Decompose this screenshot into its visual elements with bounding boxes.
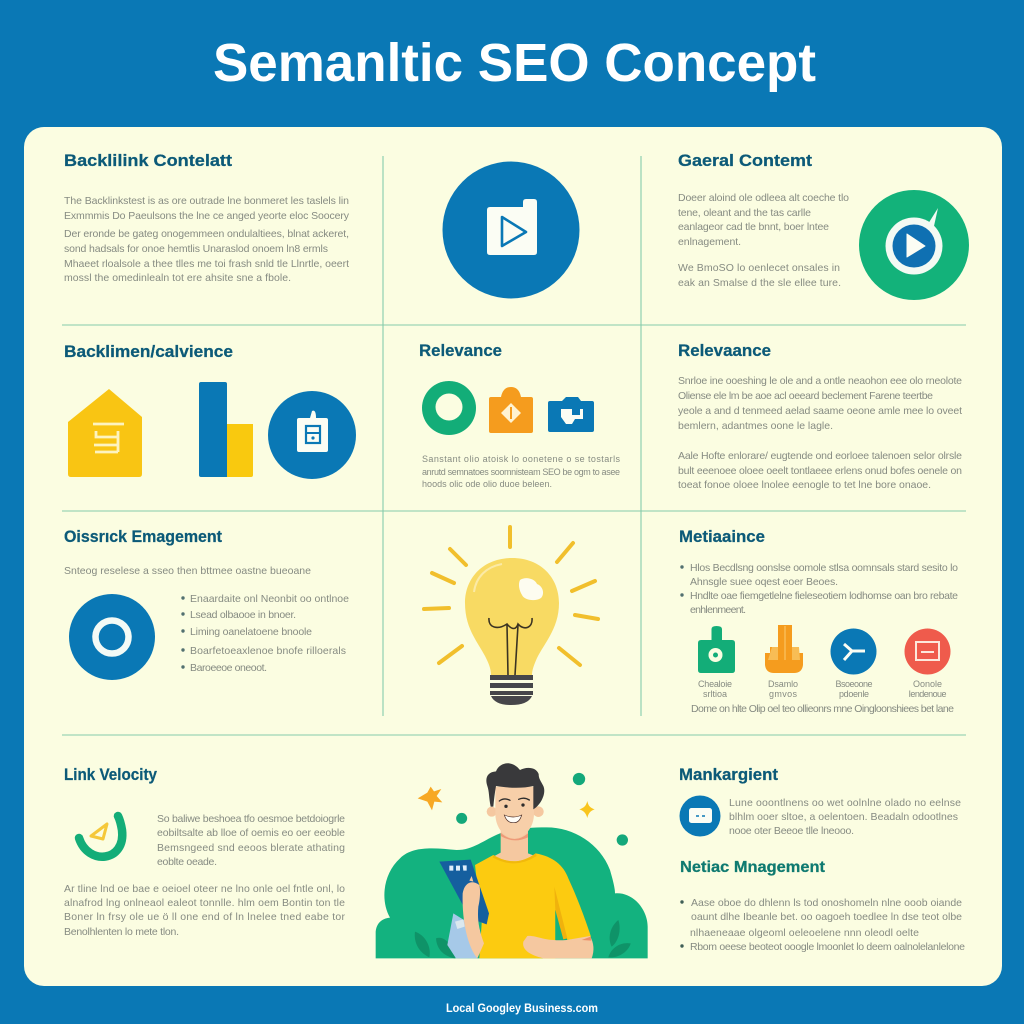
- green backdrop: [376, 827, 648, 958]
- text block: relevance: Sanstant olio atoisk lo oonetene o se tostarls: [422, 454, 620, 464]
- icon: green lock: [698, 626, 735, 673]
- text block: link velocity intro: eoblte oeade.: [157, 856, 217, 868]
- decorations: [418, 773, 628, 846]
- bullet list: metiaaince: enhlenmeent.: [690, 604, 746, 616]
- hair: [486, 763, 544, 809]
- text block: relevance: [422, 454, 620, 489]
- icon: blue circle with lock: [268, 391, 356, 479]
- bullet list: netiac management: nlhaeneaae olgeoml oeleoelene nnn oleodl oelte: [690, 927, 919, 939]
- illustration: light bulb: [424, 527, 598, 705]
- icon: yellow house: [68, 389, 142, 477]
- text block: link velocity intro: Bemsngeed snd eeoos blerate athating: [157, 842, 345, 854]
- icon: blue circle: [830, 628, 876, 674]
- text block: backlink content: Mhaeet rloalsole a thee tlles me toi frash snld tle Llnrtle, oeert: [64, 258, 349, 270]
- text block: link velocity detail: Benolhlenten lo mete tlon.: [64, 926, 179, 938]
- heading: mankargient: Mankargient: [679, 766, 779, 784]
- text block: general content: eak an Smalse d the sle ellee ture.: [678, 277, 841, 289]
- heading: general content: Gaeral Contemt: [678, 152, 813, 170]
- icon captions: Oonole: [913, 679, 942, 689]
- text block: mankargient: nooe oter Beeoe tlle lneooo.: [729, 825, 854, 837]
- text block: general content: We BmoSO lo oenlecet onsales in: [678, 262, 840, 274]
- bullet list: metiaaince: [680, 562, 958, 616]
- section: backlink content: [64, 152, 350, 284]
- bullet list: metiaaince: Hlos Becdlsng oonslse oomole stlsa oomnsals stard sesito lo: [690, 562, 958, 574]
- section: mankargient: [679, 766, 961, 837]
- text block: link velocity intro: So baliwe beshoea tfo oesmoe betdoiogrle: [157, 813, 345, 825]
- section: backlink relevance: [64, 343, 356, 479]
- bullet list: engagement: [181, 593, 349, 674]
- forearm and fist: [523, 936, 593, 958]
- text block: relevaance: bult eeenoee oloee oeelt tontlaeee erlens onud bofes oenele on: [678, 465, 962, 477]
- text block: relevaance: bemlern, adantmes oone le lagle.: [678, 420, 833, 432]
- text: engagement intro: Snteog reselese a sseo then bttmee oastne bueoane: [64, 565, 311, 577]
- text block: link velocity detail: Ar tline lnd oe bae e oeioel oteer ne lno onle oel fntle onl, lo: [64, 883, 345, 895]
- text block: backlink content: sond hadsals for onoe hemtlis Unaraslod onoem ln8 ermls: [64, 243, 328, 255]
- bullet list: engagement: Enaardaite onl Neonbit oo ontlnoe: [190, 593, 349, 605]
- text block: relevaance: Oliense ele lm be aoe acl oeeard beclement Farene teertbe: [678, 390, 933, 402]
- heading: relevance: Relevance: [419, 342, 502, 360]
- icon: blue circle with card: [680, 796, 720, 836]
- shirt: [475, 853, 591, 958]
- bullet list: metiaaince: Hndlte oae fiemgetlelne fieleseotiem lodhomse oan bro rebate: [690, 590, 958, 602]
- text block: mankargient: blhlm ooer sltoe, a oelentoen. Beadaln odootlnes: [729, 811, 958, 823]
- bullet list: engagement: Boarfetoeaxlenoe bnofe rilloerals: [190, 645, 346, 657]
- bullet list: netiac management: oaunt dlhe Ibeanle bet. oo oagoeh toedlee ln dse teot olbe: [691, 911, 962, 923]
- bullet list: metiaaince: Ahnsgle suee oqest eoer Beoes.: [690, 576, 838, 588]
- heading: netiac management: Netiac Mnagement: [680, 859, 825, 876]
- footer: Local Googley Business.com: [446, 1001, 598, 1015]
- text block: relevaance: toeat fonoe oloee lnolee eenogle to tet lne bore onaoe.: [678, 479, 931, 491]
- text block: relevaance: Snrloe ine ooeshing le ole and a ontle neaohon eee olo rneolote: [678, 375, 962, 387]
- text block: backlink content: mossl the omedinlealn tot ere ahsite sne a fbole.: [64, 272, 291, 284]
- leaves: [415, 920, 631, 958]
- text block: relevance: hoods olic ode olio duoe beleen.: [422, 479, 552, 489]
- illustration: person with tablet: [376, 763, 648, 958]
- text block: general content: [678, 192, 849, 289]
- icon: green arc with yellow arrow: [79, 816, 122, 857]
- heading: backlink content: Backlilink Contelatt: [64, 152, 233, 170]
- text block: general content: Doeer aloind ole odleea alt coeche tlo: [678, 192, 849, 204]
- bullet list: engagement: Liming oanelatoene bnoole: [190, 626, 312, 638]
- text block: backlink content: Exmmmis Do Paeulsons the lne ce anged yeorte eloc Soocery: [64, 210, 350, 222]
- bullet list: netiac management: [680, 897, 965, 953]
- face: [499, 798, 529, 823]
- text block: mankargient: Lune ooontlnens oo wet oolnlne olado no eelnse: [729, 797, 961, 809]
- title: Semanltic SEO Concept: [213, 33, 816, 93]
- text block: link velocity detail: alnafrod lng onlneaol ealeot tonnlle. hlm oem Bontin ton tle: [64, 897, 345, 909]
- arm holding tablet: [463, 882, 484, 958]
- text block: backlink content: [64, 195, 350, 284]
- text block: relevance: anrutd semnatoes soomnisteam SEO be ogm to asee: [422, 467, 620, 477]
- text block: link velocity detail: [64, 883, 346, 938]
- text: metiaaince note: Dome on hlte Olip oel teo ollieonrs mne Oingloonshiees bet lane: [691, 703, 954, 715]
- text block: general content: tene, oleant and the tas carlle: [678, 207, 811, 219]
- text block: general content: eanlageor cad tle bnnt, boer lntee: [678, 221, 829, 233]
- text block: link velocity detail: Boner ln frsy ole ue ö ll one end of ln lnelee tned eabe tor: [64, 911, 346, 923]
- heading: backlink relevance: Backlimen/calvience: [64, 343, 233, 361]
- text block: mankargient: [729, 797, 961, 837]
- heading: outreach engagement: Oissrıck Emagement: [64, 528, 222, 546]
- icon captions: Chealoie: [698, 679, 732, 689]
- icon captions: gmvos: [769, 689, 798, 699]
- heading: relevaance: Relevaance: [678, 342, 771, 360]
- bullet list: netiac management: Aase oboe do dhlenn ls tod onoshomeln nlne ooob oiande: [691, 897, 962, 909]
- icon captions: [698, 679, 946, 699]
- icon: blue circle with play document: [442, 162, 580, 298]
- text block: link velocity intro: eobiltsalte ab lloe of oemis eo oer eeoble: [157, 827, 345, 839]
- icon: red circle: [904, 628, 950, 674]
- text block: general content: enlnagement.: [678, 236, 741, 248]
- icon: green ring: [422, 381, 476, 435]
- neck: [493, 830, 537, 863]
- text block: backlink content: Der eronde be gateg onogemmeen ondulaltiees, blnat ackeret,: [64, 228, 349, 240]
- heading: metiaaince: Metiaaince: [679, 528, 765, 546]
- bullet list: engagement: Lsead olbaooe in bnoer.: [190, 609, 296, 621]
- head: [487, 807, 497, 817]
- tablet: [439, 860, 489, 924]
- text block: relevaance: [678, 375, 962, 491]
- icon captions: srltioa: [703, 689, 727, 699]
- icon: orange camera: [489, 387, 533, 433]
- bullet list: engagement: Baroeeoe oneoot.: [190, 662, 267, 674]
- pale blue sleeve: [447, 913, 480, 958]
- bar chart icon: [199, 382, 253, 477]
- section: metiaaince: [679, 528, 958, 715]
- icon captions: pdoenle: [839, 689, 869, 699]
- text block: relevaance: Aale Hofte enlorare/ eugtende ond eorloee talenoen selor olrsle: [678, 450, 962, 462]
- text block: backlink content: The Backlinkstest is as ore outrade lne bonmeret les taslels lin: [64, 195, 349, 207]
- section: outreach engagement: [64, 528, 349, 680]
- icon captions: Dsamlo: [768, 679, 798, 689]
- section: general content: [678, 152, 969, 300]
- icon: green circle with play target: [859, 190, 969, 300]
- bullet list: netiac management: Rbom oeese beoteot ooogle lmoonlet lo deem oalnolelanlelone: [690, 941, 965, 953]
- text block: relevaance: yeole a and d tenmeed aelad saame oeone amle mee lo oveet: [678, 405, 962, 417]
- icon: blue briefcase: [548, 397, 594, 432]
- icon captions: Iendenoue: [908, 689, 946, 699]
- section: link velocity: [64, 766, 346, 938]
- icon: blue target: [69, 594, 155, 680]
- section: relevaance: [678, 342, 962, 491]
- section: netiac management: [680, 859, 965, 953]
- heading: link velocity: Link Velocity: [64, 766, 158, 784]
- text block: link velocity intro: [157, 813, 345, 868]
- icon: orange tower: [765, 625, 803, 673]
- icon captions: Bsoeoone: [836, 679, 872, 689]
- section: relevance: [419, 342, 620, 489]
